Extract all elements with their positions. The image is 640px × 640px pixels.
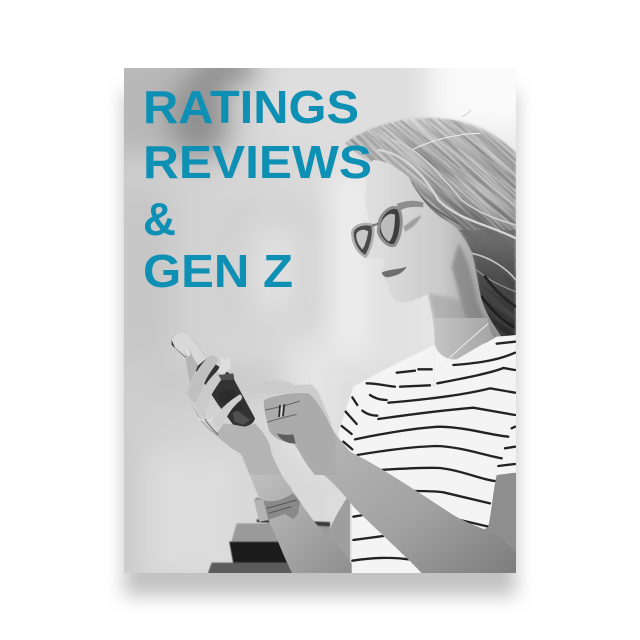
right forearm [294, 434, 516, 573]
finger two [195, 367, 227, 419]
title [143, 81, 372, 297]
striped shirt [338, 335, 517, 573]
far upper arm [330, 472, 516, 561]
drop shadow [124, 92, 516, 596]
pointing finger [276, 380, 333, 426]
right hand pointing [264, 380, 336, 475]
blurred building background [124, 68, 516, 573]
lips [382, 267, 407, 277]
finger creases [265, 401, 300, 422]
nail and shadow [217, 357, 231, 374]
finger three [221, 394, 242, 427]
brow shadow [403, 215, 422, 232]
title line: REVIEWS: REVIEWS [143, 136, 372, 188]
photo: woman using phone [124, 68, 516, 573]
face and neck [365, 160, 506, 343]
title line: GEN Z: GEN Z [143, 245, 293, 297]
palm shadow [277, 433, 296, 444]
sunglasses [352, 201, 423, 257]
blurred boxes at lower edge [207, 519, 330, 577]
wristwatch [254, 488, 300, 522]
shadow by the hair line and under the jaw [452, 243, 498, 340]
thumb behind phone [185, 348, 198, 383]
palm [190, 402, 281, 475]
phone [172, 331, 255, 427]
neck overlap and necklace [432, 318, 495, 387]
shirt stripes [342, 342, 515, 561]
title line: RATINGS: RATINGS [143, 81, 359, 133]
hair [345, 110, 516, 336]
back of hand [264, 392, 336, 475]
title line: ampersand: & [143, 193, 176, 245]
left hand holding phone [185, 348, 282, 475]
report cover illustration [114, 68, 526, 606]
finger one [188, 356, 218, 405]
ring [279, 404, 284, 417]
left forearm and wrist [242, 452, 352, 575]
